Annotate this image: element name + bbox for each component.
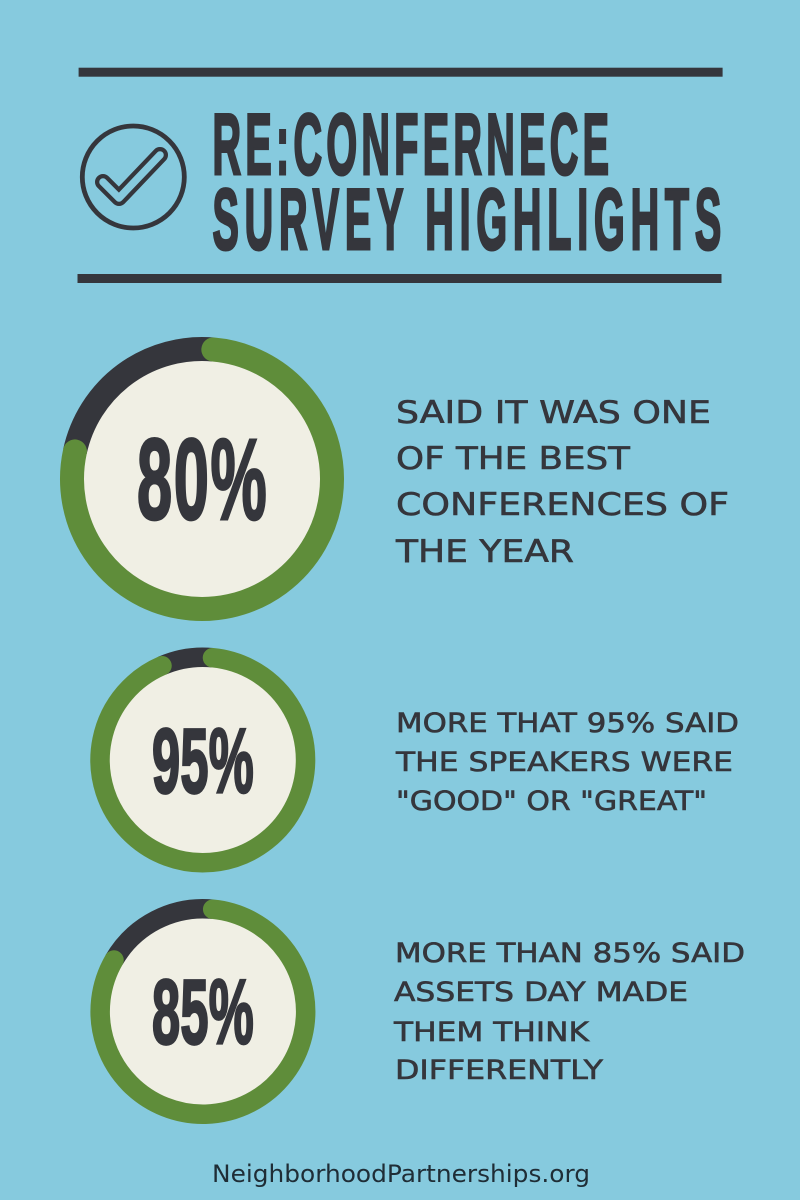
- stat: 95%: [100, 657, 739, 863]
- stat: 80%: [72, 349, 729, 609]
- text: 95% description: [395, 708, 739, 817]
- stat: 85%: [100, 909, 745, 1114]
- title: [212, 97, 721, 268]
- text: 95% description: THE SPEAKERS WERE: [395, 747, 733, 778]
- donut chart: 80%: [72, 349, 332, 609]
- text: 80% description: OF THE BEST: [396, 441, 631, 477]
- title: RE:CONFERNECE: [212, 97, 609, 193]
- text: 80% description: [395, 395, 729, 570]
- footer: website: NeighborhoodPartnerships.org: [212, 1160, 590, 1188]
- text: 80% description: SAID IT WAS ONE: [396, 395, 711, 431]
- text: 85% description: ASSETS DAY MADE: [394, 977, 688, 1008]
- top rule: [79, 68, 723, 77]
- text: 85% description: MORE THAN 85% SAID: [395, 938, 745, 969]
- text: 95% description: MORE THAT 95% SAID: [396, 708, 739, 739]
- donut chart: 95%: [100, 657, 306, 863]
- header: [78, 68, 723, 283]
- icon: check mark in circle: [82, 126, 184, 228]
- text: 85% description: [393, 938, 745, 1086]
- text: 95% description: "GOOD" OR "GREAT": [396, 786, 707, 817]
- text: 80% description: THE YEAR: [395, 534, 574, 570]
- donut chart: 85%: 85%: [152, 960, 254, 1063]
- text: 85% description: THEM THINK: [393, 1017, 590, 1048]
- text: 80% description: CONFERENCES OF: [396, 487, 729, 523]
- donut chart: 85%: [100, 909, 306, 1114]
- bottom rule: [78, 274, 722, 283]
- text: 85% description: DIFFERENTLY: [395, 1055, 604, 1086]
- donut chart: 95%: 95%: [152, 709, 254, 812]
- donut chart: 80%: 80%: [137, 415, 267, 544]
- title: SURVEY HIGHLIGHTS: [212, 172, 721, 268]
